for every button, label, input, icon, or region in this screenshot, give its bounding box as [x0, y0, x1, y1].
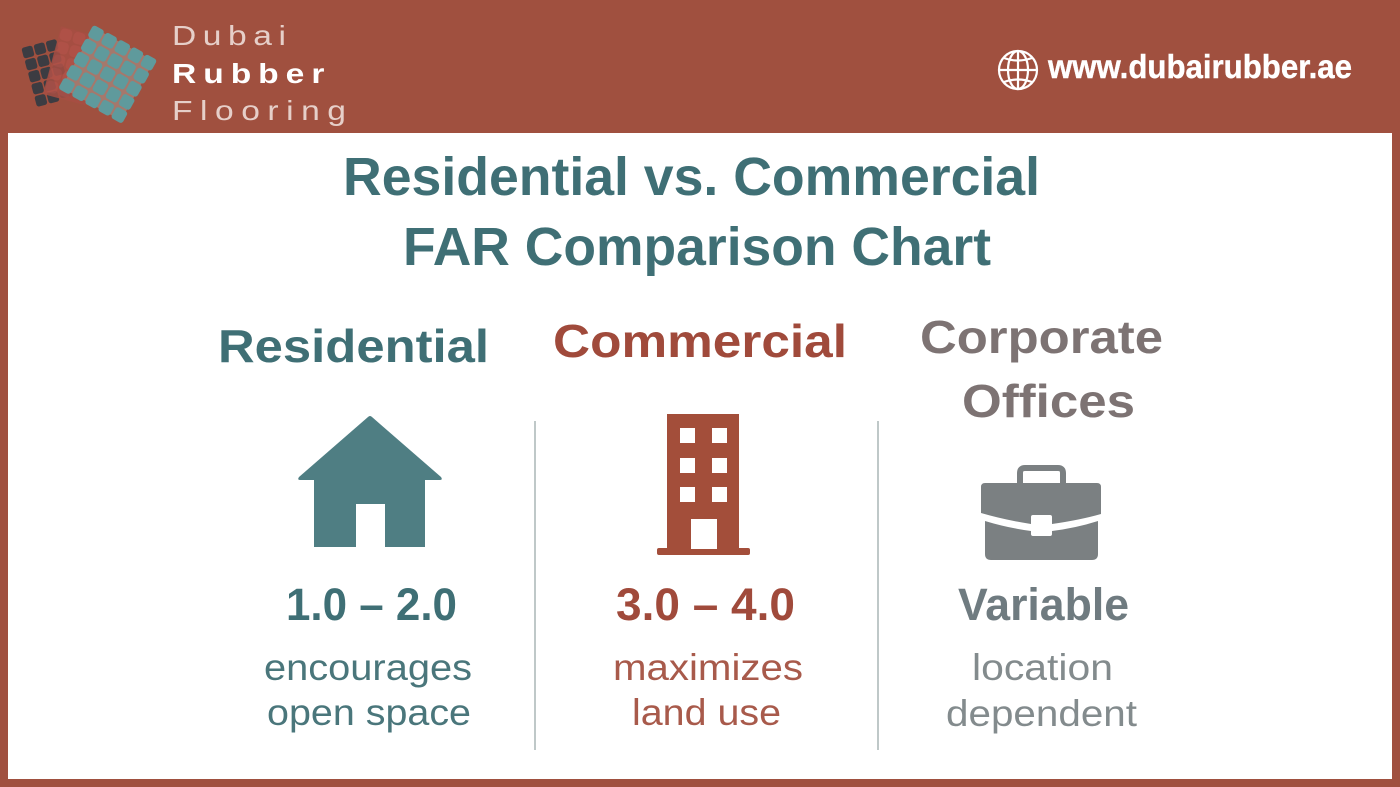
value: variable: Variable [958, 579, 1129, 630]
description: residential: open space [267, 692, 471, 733]
column: residential [218, 320, 489, 733]
description: residential: encourages [264, 647, 472, 688]
logo icon: overlapping rubber tiles [21, 25, 157, 124]
divider [877, 421, 879, 750]
logo wordmark: Flooring [172, 95, 346, 126]
logo wordmark [172, 20, 346, 126]
description: commercial: maximizes [613, 647, 803, 688]
description: residential [264, 647, 472, 733]
heading: corporate offices: Offices [962, 375, 1135, 427]
title: FAR Comparison Chart [403, 217, 991, 277]
icon: office building [657, 414, 750, 555]
heading: corporate offices: Corporate [920, 311, 1163, 363]
heading: commercial: Commercial [553, 315, 847, 367]
column: commercial [553, 315, 847, 733]
value: commercial FAR range: 3.0 – 4.0 [616, 579, 795, 630]
description: commercial: land use [632, 692, 781, 733]
title: Residential vs. Commercial [343, 147, 1040, 207]
icon: house [298, 416, 442, 547]
description: corporate offices [946, 647, 1138, 734]
description: commercial [613, 647, 803, 733]
header band [21, 20, 1352, 126]
logo wordmark: Rubber [172, 58, 324, 89]
heading: residential: Residential [218, 320, 489, 372]
column: corporate offices [920, 311, 1163, 734]
website address: www.dubairubber.ae [1047, 48, 1352, 85]
description: corporate offices: location [972, 647, 1113, 688]
value: residential FAR range: 1.0 – 2.0 [286, 579, 457, 630]
logo wordmark: Dubai [172, 20, 286, 51]
icon: globe [999, 51, 1037, 89]
title [343, 147, 1040, 277]
heading: corporate offices [920, 311, 1163, 427]
description: corporate offices: dependent [946, 693, 1138, 734]
icon: briefcase [981, 468, 1101, 560]
divider [534, 421, 536, 750]
